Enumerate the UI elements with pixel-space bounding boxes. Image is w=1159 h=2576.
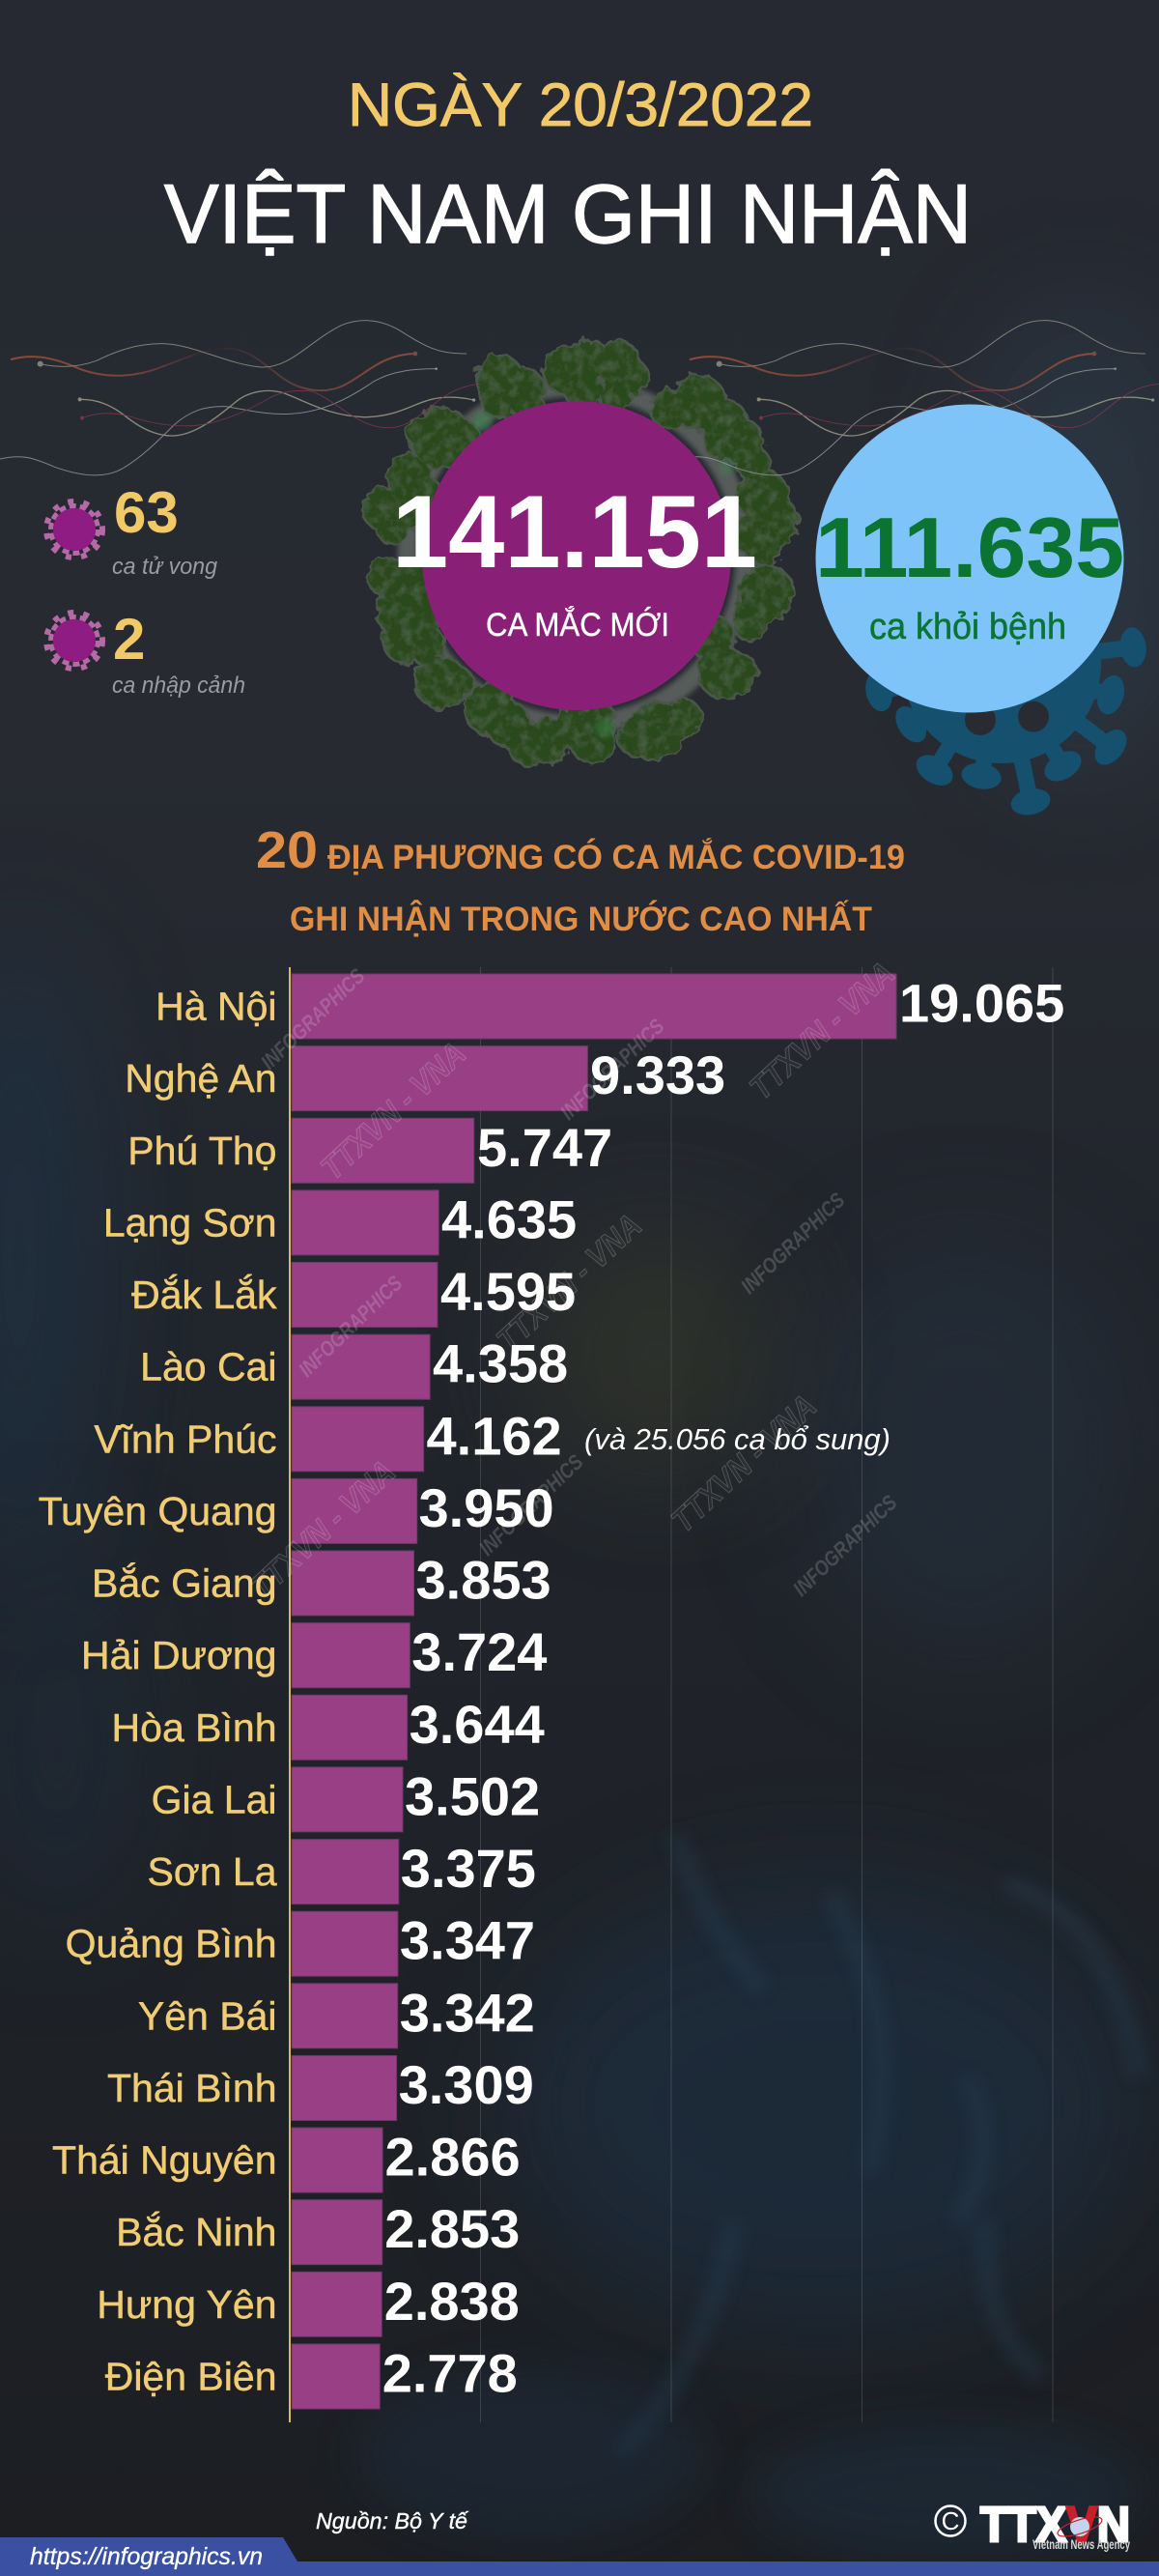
row: Bắc Ninh: Bắc Ninh	[116, 2210, 276, 2254]
stat: imported: ca nhập cảnh	[112, 673, 245, 699]
title: date: NGÀY 20/3/2022	[348, 72, 813, 139]
row: Thái Bình	[107, 2054, 534, 2120]
stat: deaths: 63	[114, 480, 179, 545]
row: Phú Thọ: Phú Thọ	[127, 1129, 276, 1173]
footer bar	[0, 2537, 1159, 2576]
row: Vĩnh Phúc	[94, 1405, 890, 1472]
row: Đắk Lắk	[131, 1261, 576, 1328]
row: Bắc Ninh: 2.853	[384, 2198, 520, 2259]
row: Bắc Giang: Bắc Giang	[92, 1561, 276, 1606]
footer url: https://infographics.vn	[30, 2543, 263, 2570]
decorative strands: right	[679, 321, 1159, 475]
number: new cases: 141.151	[392, 473, 757, 589]
row: Lào Cai	[140, 1333, 568, 1399]
row: Tuyên Quang: Tuyên Quang	[39, 1489, 276, 1533]
row: Hà Nội: 19.065	[899, 972, 1064, 1034]
stat: imported: 2	[113, 607, 145, 672]
watermarks: TTXVN - VNA	[243, 1453, 403, 1606]
heading: top 20 localities	[256, 821, 905, 938]
illustration: green coronavirus	[365, 343, 795, 761]
illustration: blue virus	[862, 563, 1148, 818]
row: Nghệ An: Nghệ An	[125, 1056, 276, 1101]
stat: deaths: ca tử vong	[112, 554, 218, 580]
row: Phú Thọ	[127, 1117, 612, 1183]
watermarks: INFOGRAPHICS	[555, 1014, 669, 1125]
watermarks: TTXVN - VNA	[490, 1207, 649, 1360]
row: Sơn La: 3.375	[401, 1838, 536, 1899]
row: Vĩnh Phúc: 4.162	[427, 1405, 562, 1467]
icon: imported virus	[46, 613, 102, 669]
decorative strands: left	[0, 321, 480, 475]
row: Sơn La	[147, 1838, 536, 1904]
row: Thái Bình: 3.309	[399, 2054, 534, 2115]
row: Đắk Lắk: 4.595	[440, 1261, 576, 1322]
row: Sơn La: Sơn La	[147, 1849, 277, 1894]
row: Hưng Yên: 2.838	[384, 2271, 520, 2332]
circle: recovered	[815, 404, 1124, 713]
row: Thái Nguyên	[52, 2126, 521, 2192]
label: new cases: CA MẮC MỚI	[486, 607, 669, 644]
row: Lạng Sơn: 4.635	[441, 1188, 577, 1250]
icon: deaths virus	[46, 501, 102, 558]
row: Thái Nguyên: 2.866	[384, 2126, 521, 2188]
row: Bắc Ninh	[116, 2198, 520, 2265]
row: Quảng Bình: 3.347	[400, 1909, 535, 1971]
watermarks: INFOGRAPHICS	[474, 1449, 588, 1560]
row: Quảng Bình: Quảng Bình	[66, 1921, 276, 1965]
title: Việt Nam ghi nhận: VIỆT NAM GHI NHẬN	[164, 168, 972, 261]
row: Hà Nội	[155, 972, 1064, 1039]
row: Yên Bái: 3.342	[400, 1983, 535, 2043]
heading: top 20 localities: ĐỊA PHƯƠNG CÓ CA MẮC COVID-19	[327, 838, 905, 876]
row: Lào Cai: 4.358	[433, 1333, 568, 1393]
logo: TTXVN: C	[942, 2506, 959, 2535]
row: Quảng Bình	[66, 1909, 535, 1976]
heading: top 20 localities: GHI NHẬN TRONG NƯỚC CAO NHẤT	[290, 900, 872, 938]
row: Tuyên Quang	[39, 1477, 554, 1543]
row: Bắc Giang: 3.853	[415, 1550, 551, 1610]
circle: new cases	[392, 401, 757, 710]
source: Nguồn: Bộ Y tế	[316, 2508, 469, 2533]
row: Hòa Bình	[112, 1694, 545, 1760]
row: Thái Nguyên: Thái Nguyên	[52, 2137, 276, 2182]
row: Hưng Yên	[97, 2271, 520, 2336]
row: Hòa Bình: 3.644	[410, 1694, 545, 1755]
row: Nghệ An	[125, 1045, 725, 1111]
row: Hải Dương: Hải Dương	[81, 1633, 276, 1677]
row: Gia Lai: 3.502	[405, 1766, 540, 1826]
row: Lạng Sơn: Lạng Sơn	[103, 1200, 276, 1245]
row: Hà Nội: Hà Nội	[155, 984, 276, 1028]
row: Lào Cai: Lào Cai	[140, 1345, 276, 1389]
row: Hải Dương	[81, 1621, 547, 1688]
bar chart: localities	[39, 972, 1064, 2409]
heading: top 20 localities: 20	[256, 821, 318, 879]
watermarks: TTXVN - VNA	[664, 1388, 824, 1540]
row: Bắc Giang	[92, 1550, 551, 1616]
watermarks: INFOGRAPHICS	[788, 1490, 902, 1601]
row: Hòa Bình: Hòa Bình	[112, 1705, 276, 1750]
row: Điện Biên	[105, 2342, 518, 2409]
watermarks: TTXVN - VNA	[743, 955, 902, 1107]
row: Yên Bái	[138, 1983, 535, 2048]
row: Vĩnh Phúc: (và 25.056 ca bổ sung)	[584, 1422, 890, 1456]
row: Điện Biên: Điện Biên	[105, 2354, 276, 2398]
number: recovered: 111.635	[815, 500, 1124, 595]
watermarks: INFOGRAPHICS	[736, 1188, 850, 1299]
row: Nghệ An: 9.333	[590, 1045, 725, 1105]
row: Hưng Yên: Hưng Yên	[97, 2282, 276, 2327]
watermarks	[243, 955, 902, 1606]
row: Phú Thọ: 5.747	[477, 1117, 612, 1178]
chart: grid lines and axis	[290, 967, 1053, 2422]
row: Yên Bái: Yên Bái	[138, 1994, 276, 2039]
row: Điện Biên: 2.778	[382, 2342, 518, 2404]
row: Hải Dương: 3.724	[411, 1621, 547, 1682]
row: Gia Lai: Gia Lai	[152, 1778, 276, 1822]
row: Gia Lai	[152, 1766, 540, 1832]
row: Thái Bình: Thái Bình	[107, 2066, 276, 2110]
label: recovered: ca khỏi bệnh	[869, 607, 1066, 647]
watermarks: INFOGRAPHICS	[256, 963, 370, 1074]
row: Lạng Sơn	[103, 1188, 577, 1255]
watermarks: INFOGRAPHICS	[294, 1271, 408, 1382]
row: Đắk Lắk: Đắk Lắk	[131, 1273, 277, 1317]
row: Tuyên Quang: 3.950	[419, 1477, 554, 1538]
stat: imported	[112, 607, 245, 699]
logo: TTXVN: TTXVN	[980, 2497, 1130, 2552]
watermarks: TTXVN - VNA	[314, 1035, 473, 1188]
row: Vĩnh Phúc: Vĩnh Phúc	[94, 1417, 276, 1461]
stat: deaths	[112, 480, 218, 580]
